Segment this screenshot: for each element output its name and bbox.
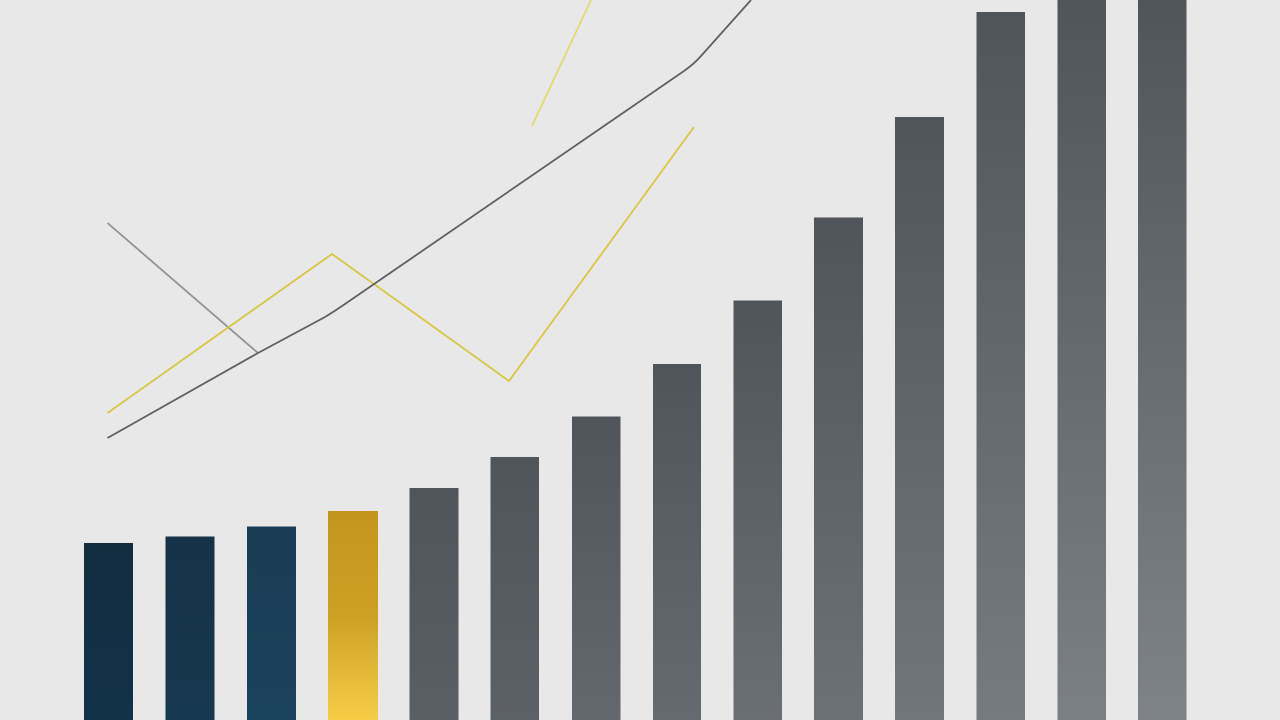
bar 10 gray: [814, 218, 863, 720]
bar 9 gray: [734, 300, 782, 720]
light gray line segment: [108, 223, 258, 353]
bar 6 gray: [490, 457, 539, 720]
bar 2 navy: [166, 536, 214, 720]
bar 4 gold highlight: [328, 511, 378, 720]
bar 13 gray: [1058, 0, 1106, 720]
bar 11 gray: [895, 117, 944, 720]
bar 5 gray: [410, 488, 458, 720]
bar 8 gray: [653, 364, 701, 720]
dark gray trend line: [108, 0, 751, 438]
bar 14 gray: [1138, 0, 1186, 720]
pale gold line segment: [532, 0, 591, 126]
bar 12 gray: [976, 12, 1025, 720]
bar 1 navy: [84, 543, 133, 720]
gold line: [108, 127, 694, 413]
bar 3 navy: [247, 526, 296, 720]
bar 7 gray: [572, 416, 620, 720]
